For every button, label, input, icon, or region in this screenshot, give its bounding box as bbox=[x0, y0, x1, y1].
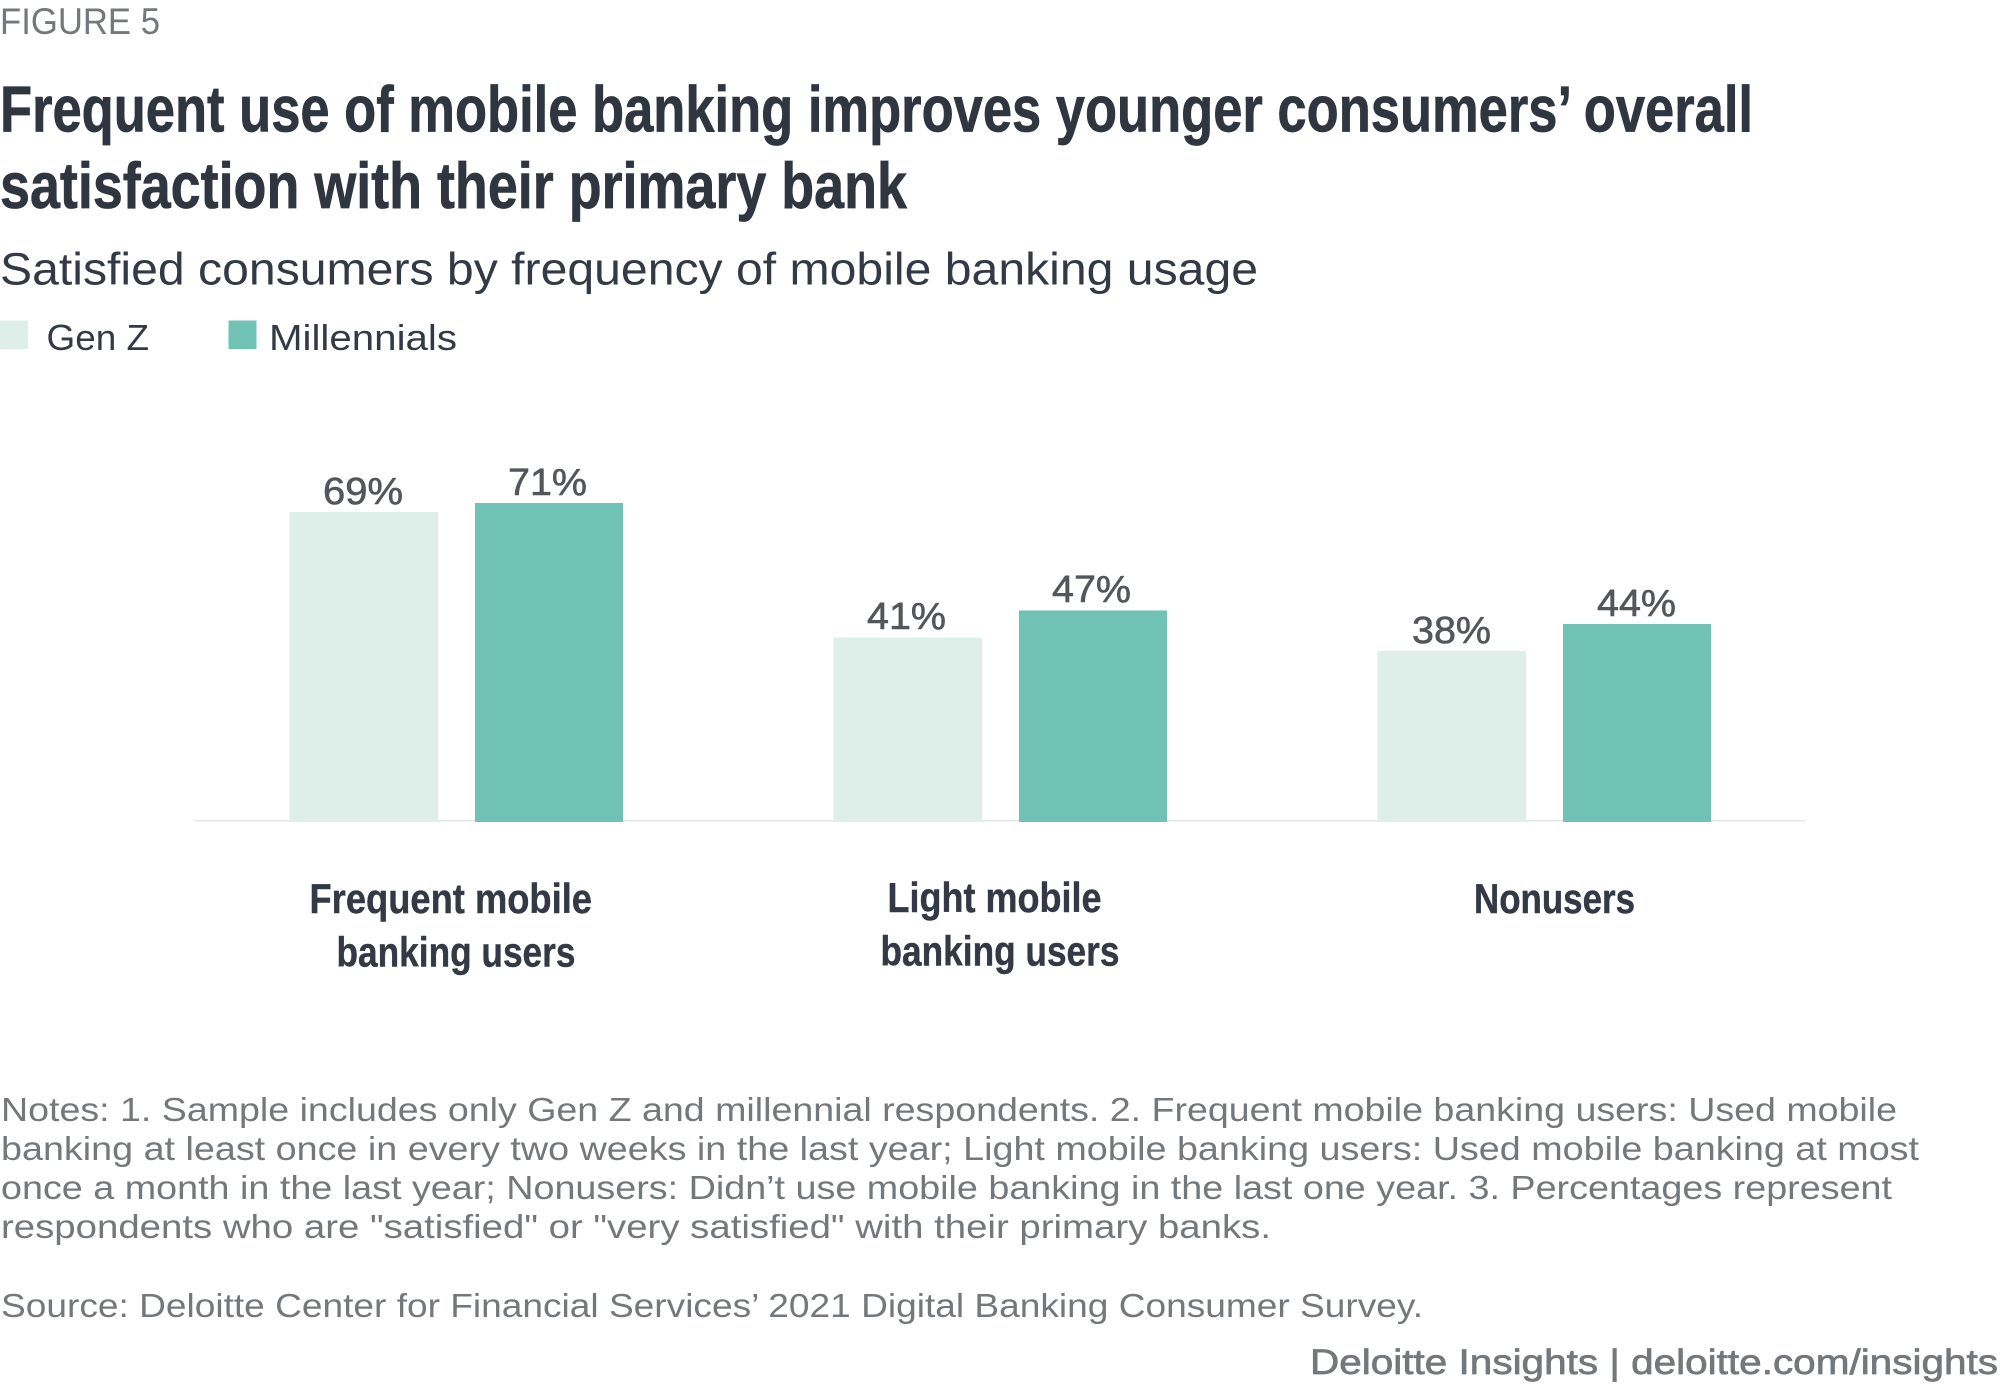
category label: Light mobile banking users: Light mobile bbox=[888, 874, 1102, 921]
bar chart bbox=[194, 462, 1805, 976]
notes: Notes: 1. Sample includes only Gen Z and millennial respondents. 2. Frequent mobile banking users: Used mobile bbox=[1, 1092, 1897, 1129]
bar: Millennials 44% bbox=[1563, 583, 1711, 822]
bar: Millennials 71%: 71% bbox=[508, 462, 587, 504]
group: Frequent mobile banking users bbox=[290, 462, 623, 976]
source: Source: Deloitte Center for Financial Services’ 2021 Digital Banking Consumer Survey. bbox=[1, 1288, 1423, 1325]
category label: Frequent mobile banking users bbox=[310, 875, 592, 976]
group: Light mobile banking users bbox=[834, 569, 1167, 974]
group: Nonusers bbox=[1378, 583, 1711, 922]
footer credit: Deloitte Insights | deloitte.com/insights bbox=[1310, 1343, 1998, 1382]
bar: Gen Z 38%: 38% bbox=[1412, 610, 1491, 652]
notes: respondents who are "satisfied" or "very satisfied" with their primary banks. bbox=[1, 1209, 1271, 1246]
bar: Gen Z 69% bbox=[290, 471, 438, 822]
category label: Light mobile banking users bbox=[880, 874, 1120, 974]
bar: Millennials 71% bbox=[475, 462, 623, 822]
bar: Millennials 44%: 44% bbox=[1597, 583, 1676, 625]
bar: Gen Z 41% bbox=[834, 596, 982, 822]
notes bbox=[1, 1092, 1920, 1246]
notes: banking at least once in every two weeks in the last year; Light mobile banking users: Used mobile banking at most bbox=[1, 1131, 1920, 1168]
title: satisfaction with their primary bank bbox=[0, 149, 908, 222]
legend item: Millennials: Millennials bbox=[269, 317, 457, 358]
figure label: FIGURE 5 bbox=[0, 1, 160, 42]
bar: Gen Z 41%: 41% bbox=[867, 596, 946, 638]
notes: once a month in the last year; Nonusers: Didn’t use mobile banking in the last one year. 3. Percentages represent bbox=[1, 1170, 1893, 1207]
category label: Frequent mobile banking users: Frequent mobile bbox=[310, 875, 592, 922]
category label: Light mobile banking users: banking users bbox=[880, 928, 1120, 974]
bar: Gen Z 69%: 69% bbox=[323, 471, 403, 513]
category label: Nonusers: Nonusers bbox=[1474, 875, 1635, 922]
legend bbox=[0, 317, 457, 358]
bar: Millennials 47%: 47% bbox=[1052, 569, 1131, 611]
legend item: Gen Z bbox=[0, 317, 149, 358]
bar: Millennials 47% bbox=[1019, 569, 1167, 822]
category label: Frequent mobile banking users: banking users bbox=[336, 928, 576, 976]
title bbox=[0, 72, 1753, 222]
legend item: Gen Z: Gen Z bbox=[46, 317, 149, 358]
bar: Gen Z 38% bbox=[1378, 610, 1526, 822]
subtitle: Satisfied consumers by frequency of mobile banking usage bbox=[0, 244, 1258, 294]
